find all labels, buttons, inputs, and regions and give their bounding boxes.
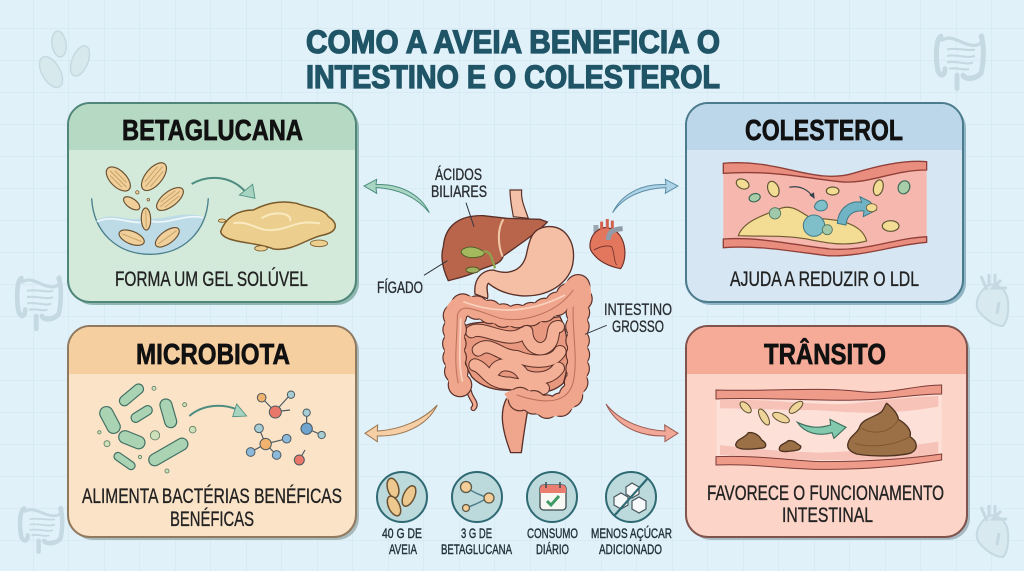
arrow: to colesterol [613, 179, 678, 213]
stomach [475, 227, 574, 299]
arrow: to trânsito [606, 404, 678, 442]
title: COMO A AVEIA BENEFICIA O [306, 24, 720, 60]
label: consumo diário: CONSUMO [527, 525, 578, 541]
faint heart icon right [977, 274, 1008, 326]
caption: alimenta bactérias benéficas: ALIMENTA BACTÉRIAS BENÉFICAS [82, 485, 342, 508]
esophagus [510, 190, 528, 218]
icon: 3 g de betaglucana [452, 472, 502, 522]
large intestine [454, 286, 581, 453]
icon: consumo diário [527, 472, 577, 522]
arrow: to microbiota [365, 405, 437, 442]
leader lines [424, 203, 607, 334]
label: 3 g de betaglucana: BETAGLUCANA [441, 541, 512, 557]
icon: 40 g de aveia [377, 472, 427, 522]
caption: forma um gel solúvel: FORMA UM GEL SOLÚVEL [115, 268, 308, 291]
label: intestino grosso [604, 301, 672, 336]
illustration: artery with plaque [723, 161, 927, 256]
label: consumo diário: DIÁRIO [536, 541, 569, 557]
label: fígado: FÍGADO [377, 278, 423, 297]
label: 40 g de aveia: AVEIA [389, 541, 417, 557]
caption: favorece o funcionamento intestinal [707, 482, 944, 527]
icon: menos açúcar adicionado [606, 472, 656, 522]
heading: colesterol: COLESTEROL [745, 115, 903, 147]
illustration: intestine with transit [716, 385, 942, 469]
label: intestino grosso: INTESTINO [604, 301, 672, 319]
caption: alimenta bactérias benéficas [82, 485, 342, 531]
faint intestine icon left [17, 276, 61, 329]
label: ácidos biliares: BILIARES [431, 183, 487, 201]
panel: betaglucana [68, 103, 359, 305]
label: intestino grosso: GROSSO [612, 318, 664, 336]
liver [442, 216, 547, 281]
faint intestine icon top right [936, 34, 983, 88]
illustration: bacteria and molecules [97, 382, 325, 473]
panel: trânsito [686, 326, 970, 540]
label: menos açúcar adicionado: ADICIONADO [599, 541, 662, 557]
caption: alimenta bactérias benéficas: BENÉFICAS [170, 508, 254, 531]
heading: trânsito: TRÂNSITO [764, 337, 886, 371]
label: 40 g de aveia: 40 G DE [382, 525, 422, 541]
faint intestine icon bottom left [20, 507, 62, 552]
title: INTESTINO E O COLESTEROL [306, 59, 720, 95]
faint heart icon bottom right [977, 505, 1008, 557]
label: consumo diário [527, 525, 578, 557]
faint oat grains icon [35, 30, 93, 91]
small intestine [462, 317, 568, 392]
label: ácidos biliares [431, 165, 487, 201]
label: 40 g de aveia [382, 525, 422, 557]
label: 3 g de betaglucana [441, 525, 512, 557]
label: 3 g de betaglucana: 3 G DE [461, 525, 492, 541]
arrow: to betaglucana [364, 179, 429, 213]
label: menos açúcar adicionado [591, 525, 672, 557]
heading: microbiota: MICROBIOTA [136, 339, 290, 371]
heading: betaglucana: BETAGLUCANA [122, 115, 303, 147]
heart [590, 219, 625, 269]
panel: microbiota [68, 326, 359, 540]
caption: ajuda a reduzir o ldl: AJUDA A REDUZIR O LDL [730, 268, 919, 291]
title [306, 24, 720, 95]
panel: colesterol [686, 103, 966, 305]
label: ácidos biliares: ÁCIDOS [435, 165, 482, 184]
caption: favorece o funcionamento intestinal: INTESTINAL [782, 504, 873, 527]
illustration: oats in water becoming gel [92, 159, 335, 254]
caption: favorece o funcionamento intestinal: FAVORECE O FUNCIONAMENTO [707, 482, 944, 505]
digestive system illustration [424, 190, 625, 453]
label: menos açúcar adicionado: MENOS AÇÚCAR [591, 525, 672, 541]
